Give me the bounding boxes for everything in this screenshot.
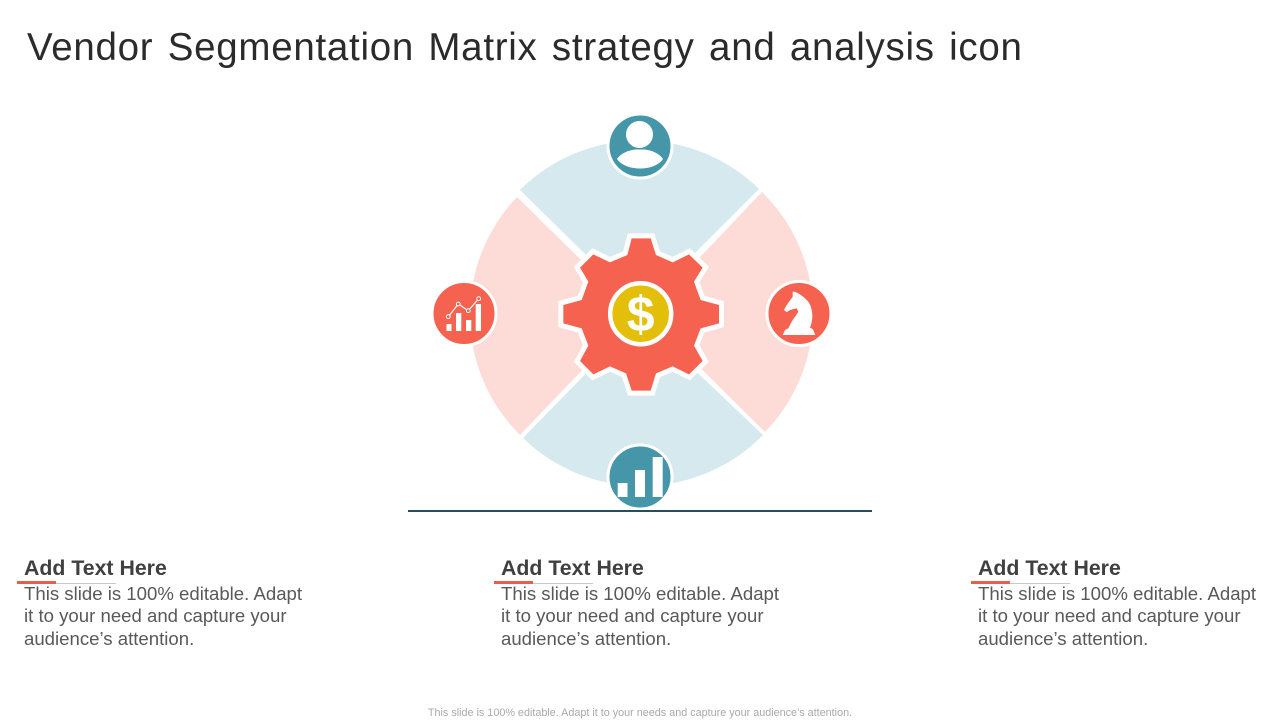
text block: right: Add Text Here [978,556,1121,580]
icon: line and bar chart [432,282,496,346]
segment: bottom [523,318,763,486]
icon: person [608,114,672,178]
text block: right [971,556,1256,649]
text block: right: audience’s attention. [978,628,1148,649]
icon: rising bars [608,445,672,509]
text block: right: it to your need and capture your [978,605,1241,626]
text block: center: This slide is 100% editable. Adapt [501,582,779,604]
text block: right: This slide is 100% editable. Adapt [978,582,1256,604]
segment: right [646,192,813,432]
text block: center: it to your need and capture your [501,605,764,626]
text block: left: This slide is 100% editable. Adapt [24,582,302,604]
title: Vendor Segmentation Matrix strategy and analysis icon [27,26,1023,69]
text block: left [17,556,302,649]
icon: chess knight [767,282,831,346]
baseline rule [408,510,872,512]
icon: gear with dollar coin [563,238,719,391]
text block: left: audience’s attention. [24,628,194,649]
text block: center: audience’s attention. [501,628,671,649]
segment: top [520,140,759,308]
text block: center [494,556,779,649]
text block: left: it to your need and capture your [24,605,287,626]
footer note: This slide is 100% editable. Adapt it to your needs and capture your audience’s attention. [428,707,852,719]
segment: left [470,197,636,435]
text block: left: Add Text Here [24,556,167,580]
text block: center: Add Text Here [501,556,644,580]
icon: gear with dollar coin: $ [627,286,655,342]
